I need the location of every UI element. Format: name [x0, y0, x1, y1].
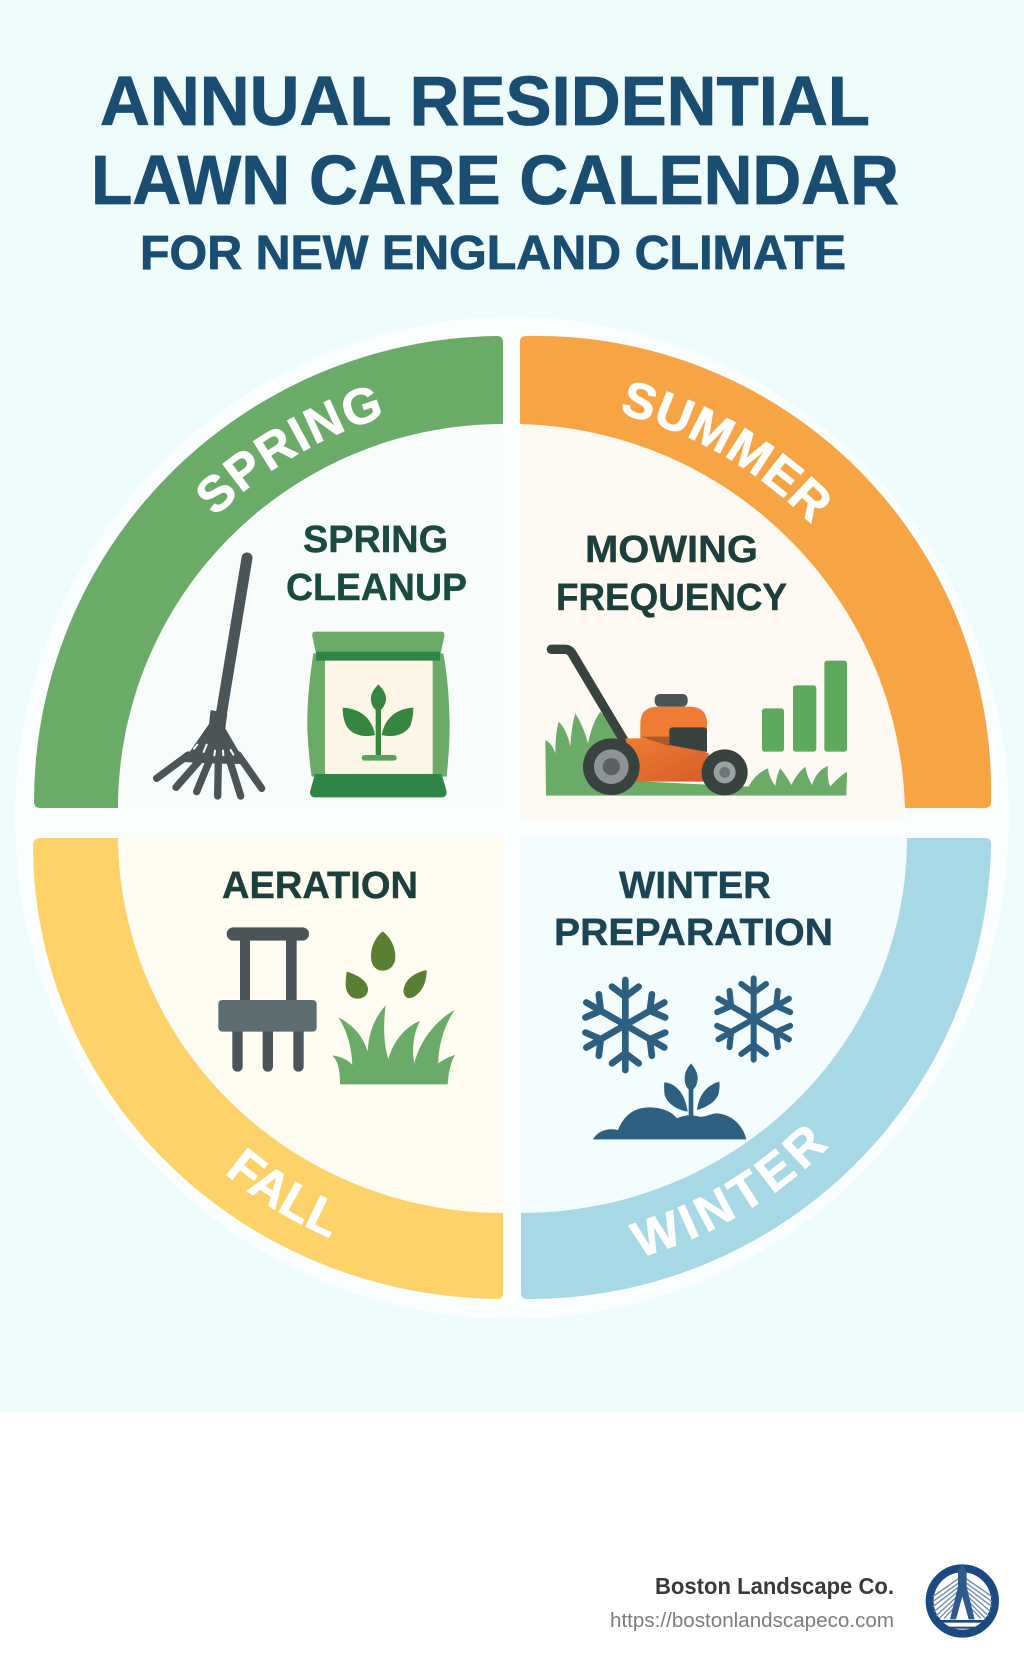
footer company name and url: Boston Landscape Co. — [655, 1573, 894, 1599]
fall heading: AERATION — [222, 865, 418, 907]
footer company name and url: https://bostonlandscapeco.com — [610, 1610, 894, 1632]
winter ring segment — [521, 838, 991, 1299]
icon: grass tuft — [332, 1005, 455, 1084]
spring heading: SPRING — [303, 519, 448, 561]
panel: winter — [521, 838, 991, 1299]
bar chart: mowing frequency — [762, 661, 847, 752]
fall season label: FALL — [226, 1148, 332, 1238]
winter heading: WINTER — [619, 865, 771, 907]
winter heading — [554, 865, 833, 954]
icon: snowflake right — [712, 978, 795, 1060]
winter heading: PREPARATION — [554, 912, 833, 954]
icon: aerator — [218, 927, 317, 1072]
summer heading: MOWING — [585, 529, 758, 571]
title: ANNUAL RESIDENTIAL — [100, 62, 870, 140]
title: FOR NEW ENGLAND CLIMATE — [140, 227, 846, 280]
icon: sprout on mound — [593, 1063, 746, 1139]
summer season label: SUMMER — [622, 382, 830, 524]
spring ring segment — [34, 336, 503, 808]
title — [91, 62, 899, 280]
icon: snowflake left — [580, 980, 671, 1070]
icon: seed bag — [307, 632, 450, 797]
panel: summer — [520, 336, 992, 820]
spring season label: SPRING — [198, 388, 381, 512]
icon: bridge logo — [930, 1563, 995, 1634]
icon: seeds — [346, 931, 427, 999]
footer company name and url — [610, 1573, 894, 1632]
title: LAWN CARE CALENDAR — [91, 141, 899, 219]
panel: fall — [33, 838, 503, 1299]
icon: rake — [157, 558, 262, 796]
spring heading: CLEANUP — [286, 567, 467, 609]
fall ring segment — [33, 838, 503, 1299]
icon: lawn mower on grass — [545, 649, 847, 796]
spring heading — [286, 519, 467, 609]
seasonal wheel — [15, 317, 1009, 1319]
summer ring segment — [520, 336, 991, 808]
summer heading: FREQUENCY — [556, 577, 787, 619]
winter season label: WINTER — [628, 1126, 830, 1256]
summer heading — [556, 529, 787, 619]
panel: spring — [34, 336, 503, 808]
